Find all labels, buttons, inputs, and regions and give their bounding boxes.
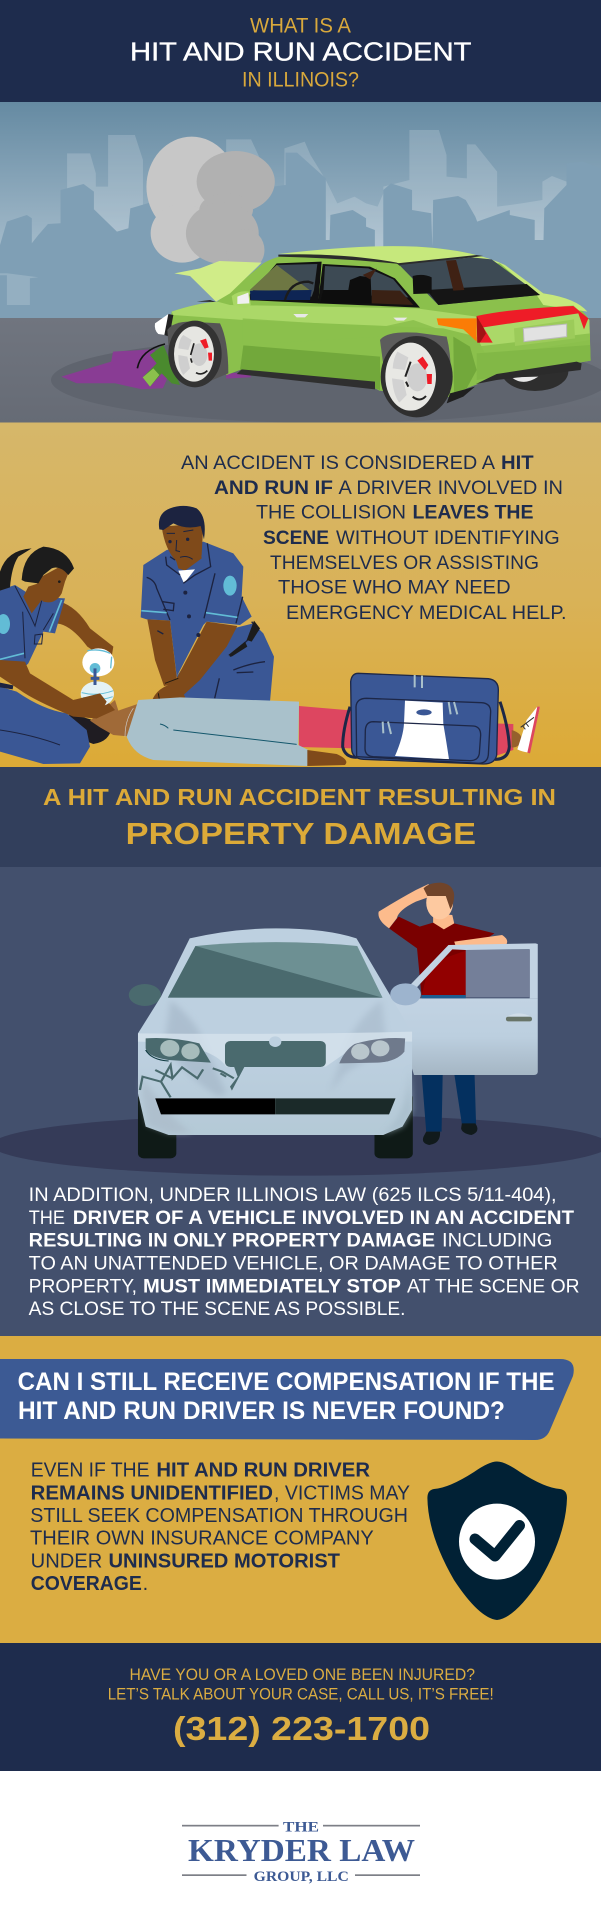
illustration: medic giving CPR [141, 506, 274, 713]
panel: call to action: LET’S TALK ABOUT YOUR CASE, CALL US, IT’S FREE! [108, 1684, 494, 1704]
paragraph: definition: THEMSELVES OR ASSISTING [270, 552, 539, 574]
paragraph: definition [181, 452, 566, 624]
paragraph: uninsured motorist: , VICTIMS MAY [274, 1482, 410, 1504]
paragraph: definition: AND RUN IF [214, 477, 333, 499]
paragraph: Illinois law: THE [29, 1208, 65, 1229]
paragraph: Illinois law: INCLUDING [442, 1231, 552, 1252]
ground shadow [51, 337, 601, 423]
paragraph: Illinois law: PROPERTY, [29, 1276, 137, 1297]
panel: compensation [0, 1336, 601, 1643]
banner: question: CAN I STILL RECEIVE COMPENSATION IF THE [18, 1368, 555, 1396]
phone number: (312) 223-1700 [173, 1710, 430, 1747]
oil puddle [61, 349, 251, 389]
title: IN ILLINOIS? [242, 69, 359, 92]
paragraph: definition: AN ACCIDENT IS CONSIDERED A [181, 452, 495, 474]
panel: call to action [0, 1643, 601, 1771]
paragraph: definition: A DRIVER INVOLVED IN [338, 477, 563, 499]
paragraph: Illinois law: MUST IMMEDIATELY STOP [143, 1276, 401, 1297]
heading: property damage: PROPERTY DAMAGE [126, 816, 476, 851]
panel: call to action: HAVE YOU OR A LOVED ONE BEEN INJURED? [130, 1665, 475, 1684]
illustration: patient lying down [68, 697, 346, 766]
banner: question: HIT AND RUN DRIVER IS NEVER FOUND? [18, 1397, 505, 1425]
paragraph: uninsured motorist: . [143, 1573, 148, 1595]
paragraph: definition: EMERGENCY MEDICAL HELP. [286, 602, 566, 624]
paragraph: definition: WITHOUT IDENTIFYING [336, 527, 560, 549]
paragraph: uninsured motorist [30, 1459, 410, 1595]
paragraph: definition: THOSE WHO MAY NEED [278, 577, 511, 599]
paragraph: Illinois law: DRIVER OF A VEHICLE INVOLVED IN AN ACCIDENT [73, 1208, 574, 1229]
title: WHAT IS A [250, 14, 351, 37]
panel: crash scene [0, 102, 601, 423]
icon: crashed green car [137, 246, 591, 417]
paragraph: definition: LEAVES THE [412, 502, 534, 524]
logo: The Kryder Law Group [182, 1820, 420, 1885]
banner: question [0, 1359, 574, 1440]
paragraph: uninsured motorist: THEIR OWN INSURANCE COMPANY [30, 1528, 374, 1550]
paragraph: uninsured motorist: HIT AND RUN DRIVER [156, 1459, 371, 1481]
heading: property damage: A HIT AND RUN ACCIDENT RESULTING IN [43, 784, 556, 810]
paragraph: Illinois law: IN ADDITION, UNDER ILLINOIS LAW (625 ILCS 5/11-404), [29, 1185, 557, 1206]
panel: damaged car [0, 867, 601, 1336]
paragraph: Illinois law: RESULTING IN ONLY PROPERTY DAMAGE [29, 1231, 435, 1252]
panel: header [0, 0, 601, 102]
smoke cloud [146, 137, 275, 271]
paragraph: Illinois law [29, 1185, 580, 1320]
icon: shield with check mark [427, 1462, 567, 1620]
logo: The Kryder Law Group: THE [283, 1820, 319, 1836]
paragraph: uninsured motorist: UNINSURED MOTORIST [108, 1550, 340, 1572]
paragraph: definition: SCENE [263, 527, 329, 549]
paragraph: uninsured motorist: COVERAGE [31, 1573, 142, 1595]
paragraph: Illinois law: AS CLOSE TO THE SCENE AS POSSIBLE. [29, 1299, 405, 1320]
paragraph: Illinois law: AT THE SCENE OR [407, 1276, 580, 1297]
panel: medical help [0, 422, 601, 767]
city skyline [0, 130, 601, 318]
paragraph: definition: THE COLLISION [256, 502, 406, 524]
paragraph: uninsured motorist: REMAINS UNIDENTIFIED [31, 1482, 273, 1504]
title [130, 14, 472, 92]
paragraph: Illinois law: TO AN UNATTENDED VEHICLE, OR DAMAGE TO OTHER [29, 1254, 558, 1275]
paragraph: definition: HIT [501, 452, 534, 474]
logo: The Kryder Law Group: GROUP, LLC [254, 1869, 349, 1885]
illustration: medic with breathing mask [0, 547, 115, 764]
title: HIT AND RUN ACCIDENT [130, 39, 472, 67]
paragraph: uninsured motorist: EVEN IF THE [31, 1459, 150, 1481]
logo: The Kryder Law Group: KRYDER LAW [188, 1832, 415, 1868]
paragraph: uninsured motorist: STILL SEEK COMPENSATION THROUGH [30, 1505, 408, 1527]
illustration: patient legs and bag [299, 673, 540, 764]
heading: property damage [0, 767, 601, 867]
illustration: damaged silver car and driver [0, 883, 601, 1176]
paragraph: uninsured motorist: UNDER [31, 1550, 102, 1572]
